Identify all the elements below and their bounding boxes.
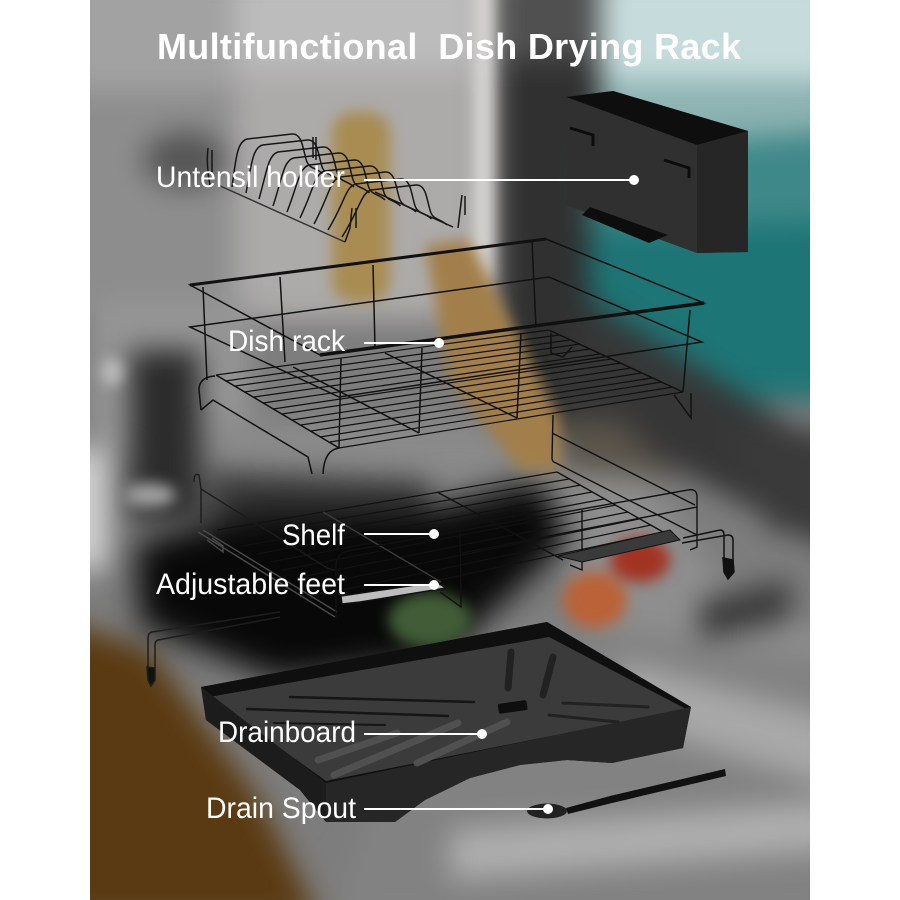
label: Drain Spout: Drain Spout xyxy=(206,792,357,825)
drain spout xyxy=(527,769,726,818)
adjustable foot right xyxy=(682,530,734,579)
label: Untensil holder xyxy=(156,161,639,194)
label: Drainboard: Drainboard xyxy=(218,716,356,749)
shelf side frames xyxy=(194,474,335,570)
dish rack xyxy=(190,239,704,474)
shelf xyxy=(194,415,697,618)
label: Drainboard xyxy=(218,716,487,749)
label: Adjustable feet: Adjustable feet xyxy=(156,568,346,601)
label: Untensil holder: Untensil holder xyxy=(156,161,345,194)
drainboard ridges xyxy=(247,652,648,775)
infographic canvas xyxy=(90,0,810,900)
utensil holder product xyxy=(566,91,748,253)
shelf wires xyxy=(217,472,663,602)
rack middle rim xyxy=(190,277,702,397)
drainboard tray xyxy=(201,622,691,822)
rack feet xyxy=(199,333,691,474)
label: Drain Spout xyxy=(206,792,553,825)
rack top rim xyxy=(190,239,704,355)
label: Dish rack xyxy=(228,325,444,358)
title: Multifunctional Dish Drying Rack xyxy=(157,26,742,67)
label: Shelf xyxy=(282,519,439,552)
label: Dish rack: Dish rack xyxy=(228,325,346,358)
drain hole xyxy=(498,700,528,714)
rack posts xyxy=(203,242,690,448)
label: Shelf: Shelf xyxy=(282,519,346,552)
adjustable foot left xyxy=(147,612,280,686)
plate holder wire rack xyxy=(207,134,465,242)
rack floor wires xyxy=(216,330,683,448)
shelf bottom clips xyxy=(207,538,223,552)
